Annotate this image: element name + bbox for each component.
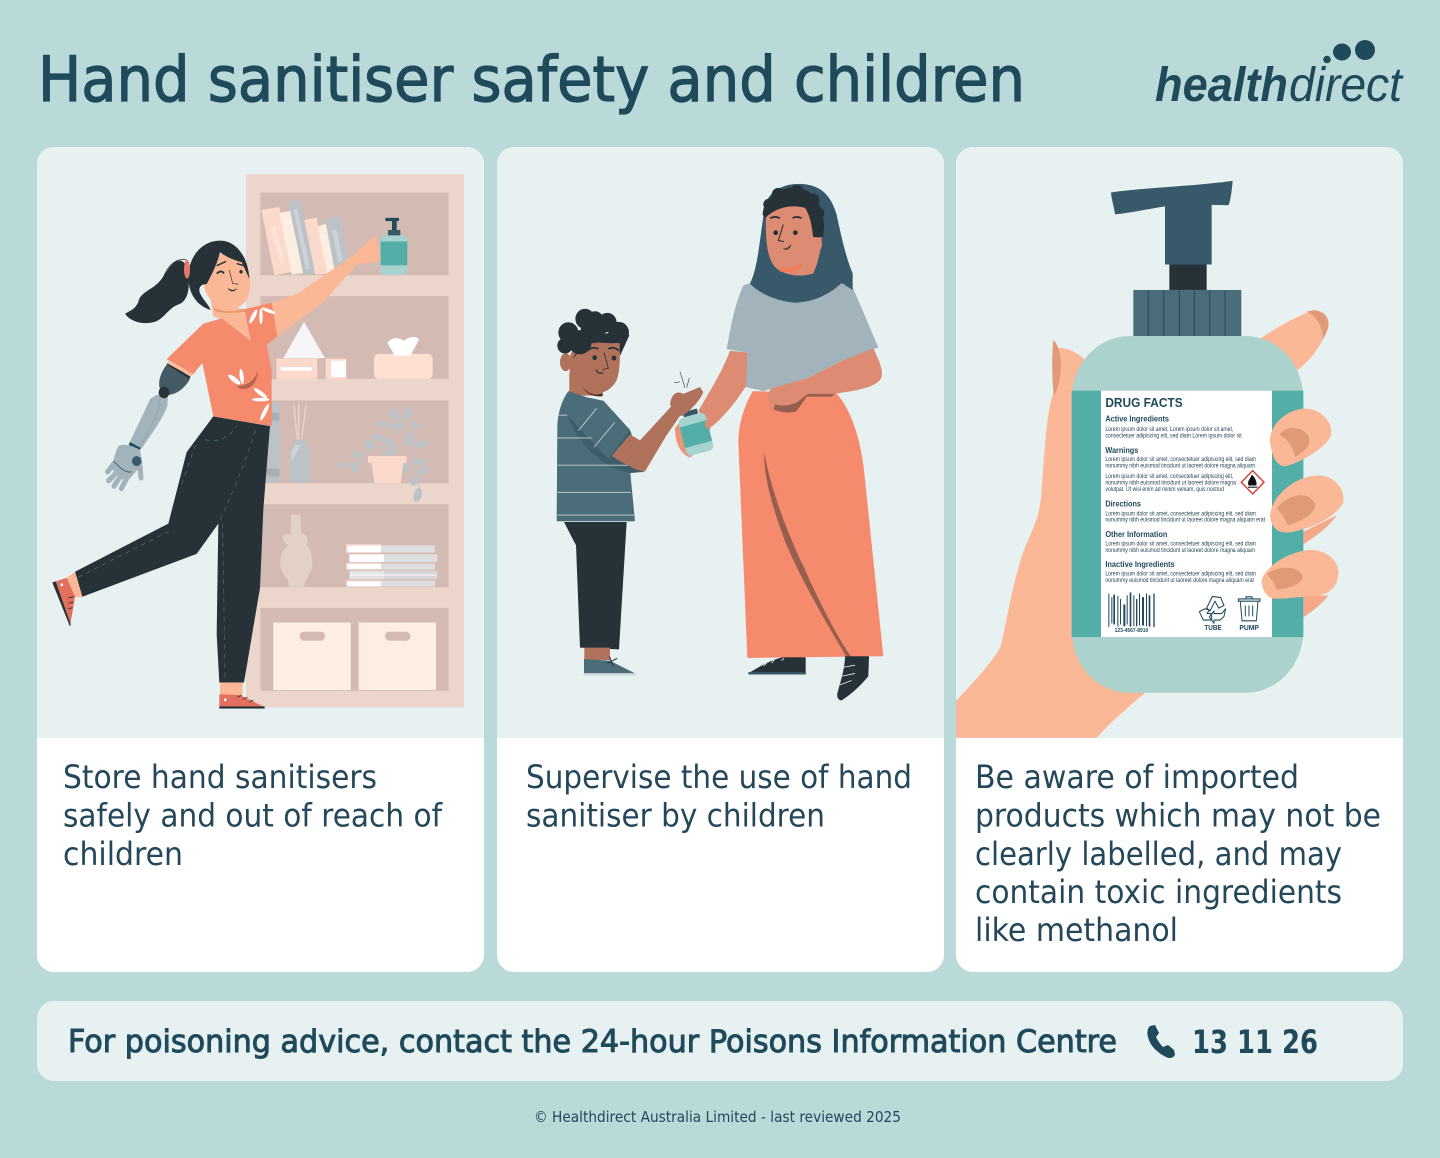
icon: bin [1238, 597, 1260, 621]
woman figure [52, 235, 380, 709]
phone number: 13 11 26 [1192, 1023, 1318, 1061]
text: supervise children: sanitiser by children [526, 796, 825, 834]
child arm [612, 404, 683, 471]
fingers [1262, 408, 1344, 599]
text: store safely: safely and out of reach of [63, 796, 443, 834]
text: imported products: contain toxic ingredients [975, 873, 1342, 911]
woman figure [698, 184, 883, 700]
woman shoes [748, 657, 806, 675]
panel: supervise children [497, 147, 944, 972]
panel: store safely [37, 147, 484, 972]
drug facts label: Warnings [1105, 446, 1139, 455]
bookshelf [246, 174, 464, 707]
bin and recycling captions: PUMP [1239, 625, 1260, 632]
shoes [67, 572, 82, 598]
icon: flammable hazard diamond [1241, 471, 1264, 494]
callout: poisons information [37, 1001, 1403, 1081]
drug facts label: Lorem ipsum dolor sit amet, Lorem ipsum dolor sit amet, [1105, 427, 1234, 433]
text: supervise children [526, 758, 912, 834]
drug facts label: Lorem ipsum dolor sit amet, consectetuer adipiscing elit, sed diam [1105, 541, 1256, 548]
drug facts label: nonummy nibh euismod tincidunt ut laoreet dolore magna [1105, 480, 1237, 487]
drug facts label: Lorem ipsum dolor sit amet, consectetuer adipiscing elit, sed diam [1105, 511, 1256, 517]
drug facts label: nonummy nibh euismod tincidunt ut laoreet dolore magna aliquam [1105, 548, 1255, 554]
bin and recycling captions [1204, 625, 1260, 632]
drug facts label: Lorem ipsum dolor sit amet, consectetuer adipiscing elit, [1105, 474, 1234, 480]
drug facts label: Inactive Ingredients [1105, 560, 1175, 569]
reaching arm [272, 235, 380, 336]
illustration: woman placing sanitiser on bookshelf [52, 174, 464, 709]
bottle [1072, 181, 1303, 693]
text: supervise children: Supervise the use of hand [526, 758, 912, 796]
barcode number: 123-4567-8910 [1115, 628, 1148, 634]
bin and recycling captions: TUBE [1204, 625, 1222, 632]
hand [956, 310, 1337, 738]
drug facts label: Directions [1105, 499, 1141, 509]
logo: healthdirect: direct [1289, 59, 1404, 112]
prosthetic arm [159, 365, 190, 395]
footer copyright: © Healthdirect Australia Limited - last reviewed 2025 [534, 1108, 901, 1126]
logo: healthdirect [1155, 40, 1404, 112]
icon: sanitiser bottle on shelf [381, 218, 407, 275]
text: imported products: products which may not be [975, 796, 1381, 834]
icon: barcode [1108, 592, 1155, 627]
drug facts label: Lorem ipsum dolor sit amet, consectetuer adipiscing elit, sed diam [1105, 572, 1256, 578]
shirt [167, 303, 277, 426]
child figure [557, 309, 703, 676]
drug facts label: nonummy nibh euismod tincidunt ut laoreet dolore magna aliquam erat [1105, 517, 1265, 524]
drug facts label: Active Ingredients [1105, 414, 1169, 424]
drug facts label: Lorem ipsum dolor sit amet, consectetuer adipiscing elit, sed diam [1105, 457, 1256, 463]
text: imported products: like methanol [975, 911, 1178, 949]
drug facts label: DRUG FACTS [1105, 396, 1183, 410]
sanitiser bottle held [675, 395, 714, 458]
logo: healthdirect: health [1155, 59, 1288, 112]
text: imported products [975, 758, 1381, 949]
drug facts label: volutpat. Ut wisi enim ad minim veniam, quis nostrud [1105, 487, 1224, 493]
panel: imported products [956, 147, 1403, 972]
drug facts label: nonummy nibh euismod tincidunt ut laoreet dolore magna aliquam [1105, 464, 1255, 470]
callout text: For poisoning advice, contact the 24-hour Poisons Information Centre [68, 1024, 1117, 1060]
drug facts label: consectetuer adipiscing elit, sed diam Lorem ipsum dolor sit [1105, 433, 1242, 440]
drug facts label: nonummy euismod tincidunt ut laoreet dolore magna aliquam erat [1105, 578, 1254, 584]
icon: recycling [1199, 596, 1226, 623]
trousers [75, 416, 270, 682]
text: store safely [63, 758, 443, 873]
illustration: hand holding labelled bottle [956, 181, 1344, 738]
text: imported products: Be aware of imported [975, 758, 1299, 796]
text: imported products: clearly labelled, and may [975, 835, 1342, 873]
text: store safely: children [63, 835, 183, 873]
text: store safely: Store hand sanitisers [63, 758, 377, 796]
child head [560, 353, 571, 371]
title: Hand sanitiser safety and children [38, 43, 1025, 116]
drug facts label [1101, 391, 1272, 637]
illustration: mother and child using sanitiser [557, 184, 883, 700]
icon: phone [1147, 1025, 1175, 1058]
drug facts label: Other Information [1105, 530, 1167, 539]
